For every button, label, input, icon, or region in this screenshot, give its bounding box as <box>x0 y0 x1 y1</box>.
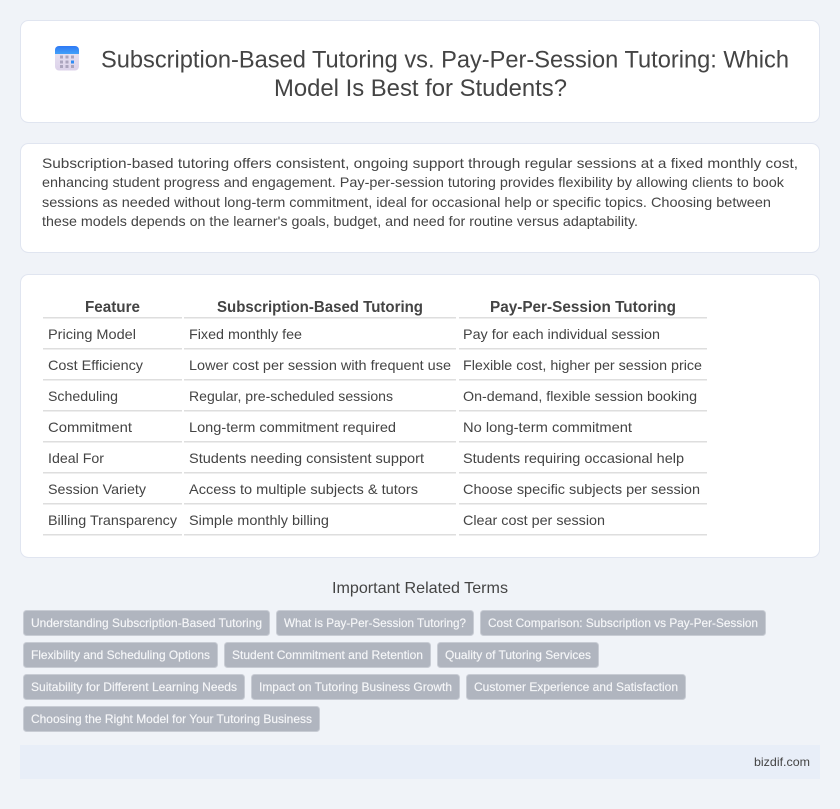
tag <box>438 642 598 668</box>
footer bar <box>20 745 820 779</box>
row: cost efficiency: Lower cost per session with frequent use <box>189 357 451 373</box>
row: billing transparency <box>48 512 605 528</box>
row: ideal for <box>48 450 684 466</box>
row: ideal for: Students requiring occasional help <box>463 450 684 466</box>
tag <box>466 674 686 700</box>
row: session variety: Choose specific subjects per session <box>463 481 700 497</box>
tag <box>24 642 218 668</box>
tag: What is Pay-Per-Session Tutoring? <box>284 616 466 630</box>
row: commitment: Long-term commitment required <box>189 419 396 435</box>
row: scheduling: Scheduling <box>48 388 118 404</box>
tag: Student Commitment and Retention <box>232 648 423 662</box>
icon: calendar <box>55 46 79 70</box>
tag <box>24 674 244 700</box>
panel: title header <box>20 20 820 122</box>
tag: Flexibility and Scheduling Options <box>31 648 210 662</box>
table header <box>85 299 676 316</box>
tag <box>24 610 270 636</box>
tag <box>252 674 460 700</box>
row: scheduling: On-demand, flexible session booking <box>463 388 697 404</box>
tag: Quality of Tutoring Services <box>445 648 591 662</box>
row: billing transparency: Clear cost per session <box>463 512 605 528</box>
title: Subscription-Based Tutoring vs. Pay-Per-Session Tutoring: Which <box>101 46 789 74</box>
table header: Pay-Per-Session Tutoring <box>490 299 676 316</box>
row: pricing model: Pricing Model <box>48 326 136 342</box>
tag <box>276 610 474 636</box>
row: billing transparency: Billing Transparency <box>48 512 177 528</box>
panel: summary paragraph: these models depends on the learner's goals, budget, and need for routine versus adaptability. <box>42 213 638 229</box>
row: session variety: Session Variety <box>48 481 146 497</box>
panel: summary paragraph: Subscription-based tutoring offers consistent, ongoing support through regular sessions at a fixed monthly cost, <box>42 155 798 171</box>
panel: summary paragraph: sessions as needed without long-term commitment, ideal for occasional help or specific topics. Choosing between <box>42 194 771 210</box>
row: session variety: Access to multiple subjects & tutors <box>189 481 418 497</box>
footer bar: bizdif.com <box>754 755 810 769</box>
tag: Cost Comparison: Subscription vs Pay-Per-Session <box>488 616 758 630</box>
tag: Choosing the Right Model for Your Tutoring Business <box>31 712 312 726</box>
row: cost efficiency: Cost Efficiency <box>48 357 143 373</box>
tag cloud <box>24 610 766 732</box>
row: commitment: No long-term commitment <box>463 419 632 435</box>
row: cost efficiency <box>48 357 702 373</box>
row: scheduling <box>48 388 697 404</box>
tag <box>480 610 766 636</box>
row: ideal for: Ideal For <box>48 450 104 466</box>
heading: important related terms: Important Related Terms <box>332 580 508 597</box>
row: cost efficiency: Flexible cost, higher per session price <box>463 357 702 373</box>
tag: Customer Experience and Satisfaction <box>474 680 678 694</box>
title: Model Is Best for Students? <box>274 75 567 102</box>
tag <box>24 706 320 732</box>
tag: Impact on Tutoring Business Growth <box>259 680 452 694</box>
panel: summary paragraph: enhancing student progress and engagement. Pay-per-session tutoring provides flexibility by allowing clients to book <box>42 174 785 190</box>
row: pricing model: Pay for each individual session <box>463 326 660 342</box>
tag <box>224 642 430 668</box>
row: billing transparency: Simple monthly billing <box>189 512 329 528</box>
row: pricing model: Fixed monthly fee <box>189 326 302 342</box>
panel: comparison table <box>20 274 820 558</box>
row: ideal for: Students needing consistent support <box>189 450 424 466</box>
row: session variety <box>48 481 700 497</box>
panel: summary paragraph <box>20 144 820 252</box>
tag: Suitability for Different Learning Needs <box>31 680 237 694</box>
row: pricing model <box>48 326 660 342</box>
tag: Understanding Subscription-Based Tutoring <box>31 616 262 630</box>
table header: Feature <box>85 299 140 316</box>
title <box>101 46 789 102</box>
row: scheduling: Regular, pre-scheduled sessions <box>189 388 393 404</box>
table header: Subscription-Based Tutoring <box>217 299 423 316</box>
row: commitment <box>48 419 632 435</box>
row: commitment: Commitment <box>48 419 132 435</box>
